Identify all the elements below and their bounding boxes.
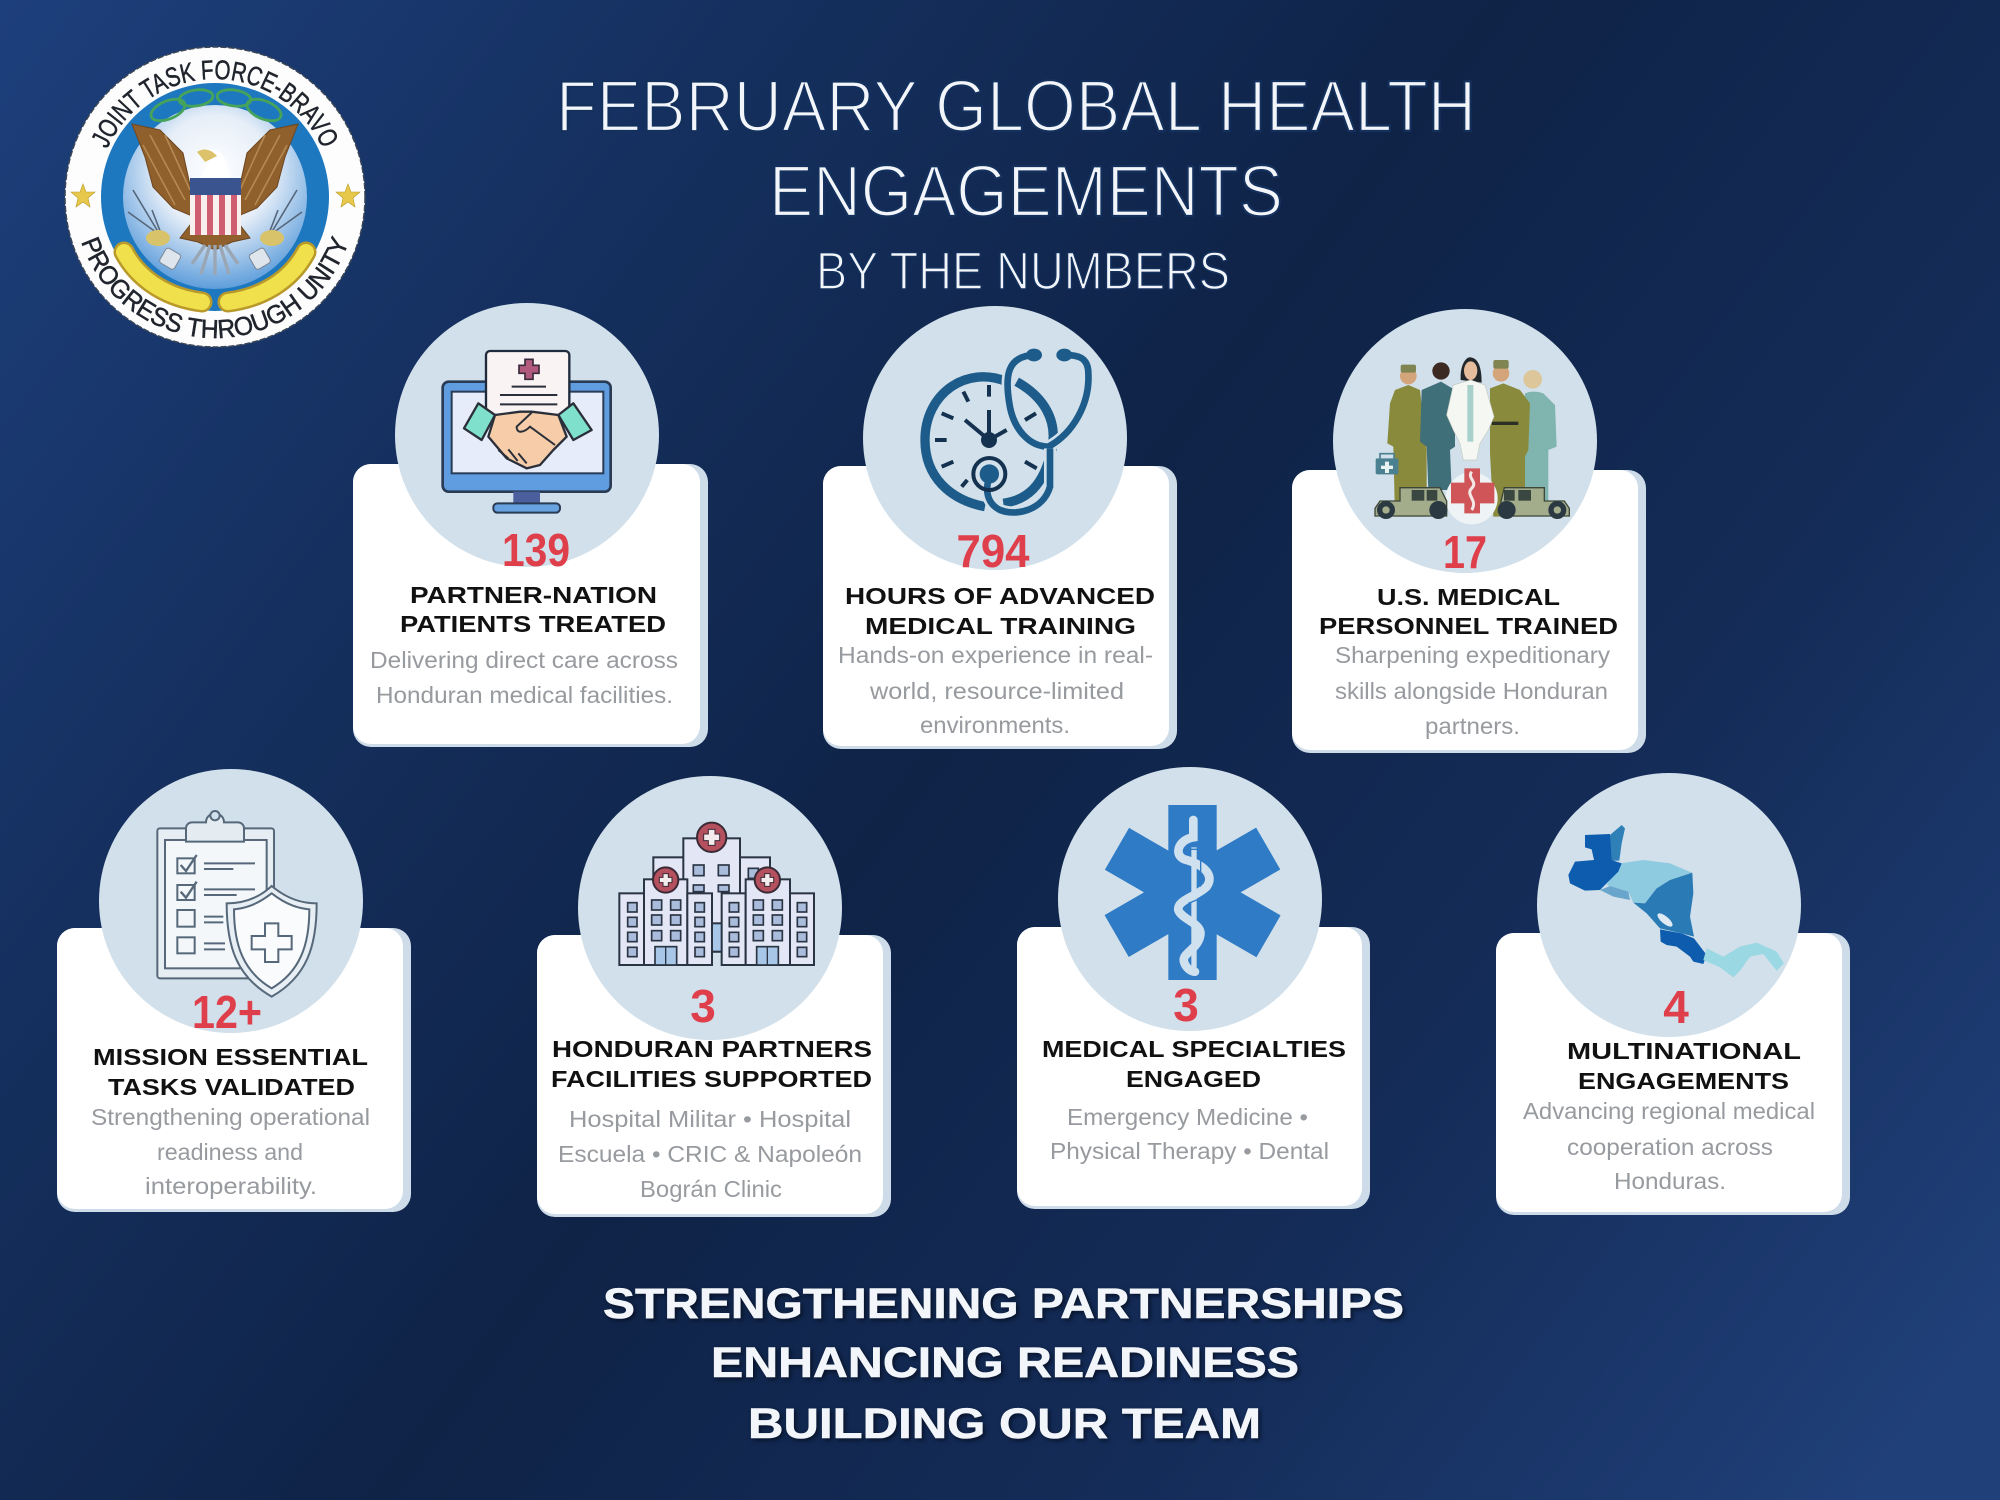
panel: mission essential tasks validated <box>57 769 411 1212</box>
description: cooperation across <box>1567 1134 1773 1160</box>
heading <box>1567 1038 1801 1094</box>
footer slogan: STRENGTHENING PARTNERSHIPS <box>603 1280 1404 1328</box>
description <box>558 1106 862 1202</box>
description: Sharpening expeditionary <box>1335 642 1611 668</box>
number: 3 <box>1173 979 1199 1031</box>
title: FEBRUARY GLOBAL HEALTH <box>556 67 1476 147</box>
description <box>1335 642 1611 739</box>
footer slogan: BUILDING OUR TEAM <box>748 1400 1261 1448</box>
icon: monitor with handshake and medical document <box>443 351 611 513</box>
stars <box>71 184 360 207</box>
description: interoperability. <box>145 1173 317 1199</box>
icon circle <box>1058 767 1322 1031</box>
description: Honduras. <box>1614 1168 1726 1194</box>
heading <box>400 582 666 637</box>
icon: clock with stethoscope <box>925 349 1088 512</box>
number: 17 <box>1443 526 1487 578</box>
card <box>353 464 708 747</box>
description: partners. <box>1425 713 1520 739</box>
chain <box>148 88 284 125</box>
heading <box>93 1044 368 1100</box>
panel: Honduran partners facilities supported <box>537 776 891 1217</box>
subtitle: BY THE NUMBERS <box>816 242 1230 301</box>
heading: MULTINATIONAL <box>1567 1038 1801 1064</box>
number: 139 <box>502 524 570 576</box>
description <box>838 642 1153 738</box>
description: Escuela • CRIC & Napoleón <box>558 1141 862 1167</box>
description: Physical Therapy • Dental <box>1050 1138 1329 1164</box>
title <box>556 67 1476 301</box>
panel: hours of advanced medical training <box>823 306 1177 749</box>
wheat wreaths <box>124 252 306 302</box>
icon: hospital buildings <box>619 823 814 965</box>
description: Delivering direct care across <box>370 647 678 673</box>
eagle talons and olive <box>146 230 284 270</box>
icon circle <box>1537 773 1801 1037</box>
card <box>1292 470 1646 753</box>
panel: medical specialties engaged <box>1017 767 1370 1209</box>
heading: PARTNER-NATION <box>410 582 657 608</box>
wing feather lines <box>143 135 287 205</box>
heading <box>1319 584 1618 639</box>
icon circle <box>395 303 659 567</box>
description: Strengthening operational <box>91 1104 370 1130</box>
icon circle <box>1333 309 1597 573</box>
panel: multinational engagements <box>1496 773 1850 1215</box>
arrows <box>128 190 302 236</box>
card <box>537 935 891 1217</box>
card <box>1017 927 1370 1209</box>
description: Advancing regional medical <box>1523 1098 1815 1124</box>
title: ENGAGEMENTS <box>769 152 1283 232</box>
description: Hands-on experience in real- <box>838 642 1153 668</box>
number: 794 <box>956 525 1030 577</box>
card <box>823 466 1177 749</box>
seal text: top arc: JOINT TASK FORCE-BRAVO <box>92 60 337 148</box>
seal text: bottom arc: PROGRESS THROUGH UNITY <box>82 235 347 338</box>
panel: partner-nation patients treated <box>353 303 708 747</box>
description <box>370 647 678 708</box>
icon: map of Central America <box>1568 825 1784 977</box>
heading: MISSION ESSENTIAL <box>93 1044 368 1070</box>
description <box>1523 1098 1815 1194</box>
description <box>91 1104 370 1199</box>
description: skills alongside Honduran <box>1335 678 1608 704</box>
description: Bográn Clinic <box>640 1176 782 1202</box>
heading: HONDURAN PARTNERS <box>552 1036 872 1062</box>
heading <box>845 583 1155 639</box>
heading: PATIENTS TREATED <box>400 611 666 637</box>
number: 12+ <box>192 986 262 1038</box>
card <box>57 928 411 1212</box>
number: 4 <box>1663 981 1689 1033</box>
footer slogan <box>603 1280 1404 1448</box>
description: world, resource-limited <box>869 678 1124 704</box>
heading: MEDICAL TRAINING <box>865 613 1136 639</box>
heading: ENGAGEMENTS <box>1578 1068 1789 1094</box>
logo: Joint Task Force-Bravo seal <box>64 46 366 348</box>
heading <box>1042 1036 1346 1092</box>
heading: TASKS VALIDATED <box>108 1074 355 1100</box>
eagle head <box>197 149 230 178</box>
eagle tail <box>192 245 238 275</box>
eagle wings <box>132 124 298 250</box>
eagle shield <box>190 178 241 235</box>
heading: U.S. MEDICAL <box>1377 584 1560 610</box>
icon: medical team with vehicles <box>1375 357 1569 524</box>
description: Emergency Medicine • <box>1067 1104 1308 1130</box>
icon: clipboard checklist with shield <box>157 811 317 997</box>
icon circle <box>99 769 363 1033</box>
icon: star of life <box>1105 805 1281 980</box>
heading: HOURS OF ADVANCED <box>845 583 1155 609</box>
heading: ENGAGED <box>1126 1066 1261 1092</box>
card <box>1496 933 1850 1215</box>
footer slogan: ENHANCING READINESS <box>711 1339 1299 1387</box>
heading: PERSONNEL TRAINED <box>1319 613 1618 639</box>
description: Hospital Militar • Hospital <box>569 1106 851 1132</box>
number: 3 <box>690 980 716 1032</box>
heading: FACILITIES SUPPORTED <box>551 1066 872 1092</box>
description: Honduran medical facilities. <box>376 682 673 708</box>
icon circle <box>578 776 842 1040</box>
description: readiness and <box>157 1139 303 1165</box>
panel: U.S. medical personnel trained <box>1292 309 1646 753</box>
description: environments. <box>920 712 1070 738</box>
description <box>1050 1104 1329 1164</box>
icon circle <box>863 306 1127 570</box>
heading: MEDICAL SPECIALTIES <box>1042 1036 1346 1062</box>
heading <box>551 1036 872 1092</box>
